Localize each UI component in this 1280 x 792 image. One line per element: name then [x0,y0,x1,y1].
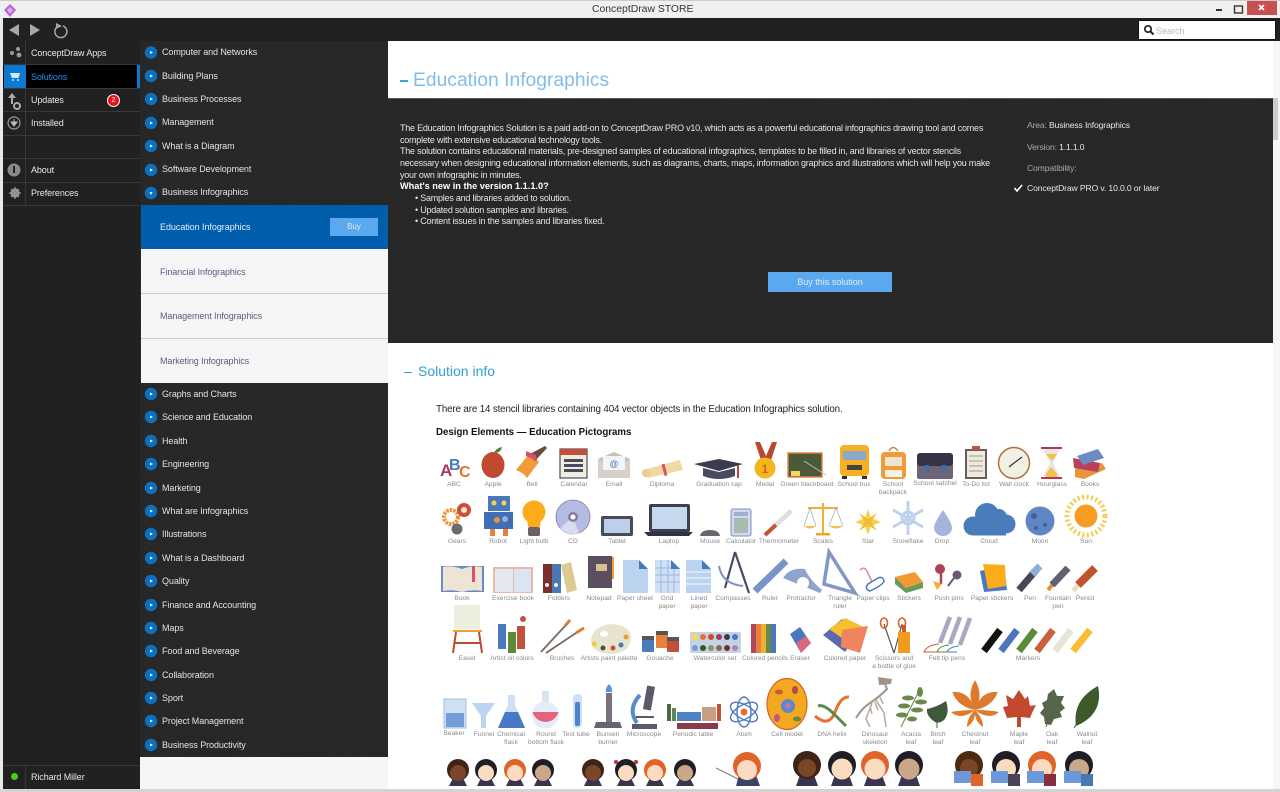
icon: ruler [755,561,786,602]
icon: paper sheet: Paper sheet [617,595,653,602]
description paragraph: your own infographic in minutes. [400,170,522,180]
icon: book: Book [454,595,470,602]
pupils row: boys [447,759,554,786]
icon: to-do list: To-Do list [962,481,990,488]
category: Maps [162,623,184,633]
icon: dinosaur skeleton: Dinosaur [862,731,889,738]
icon: birch leaf [927,701,948,746]
toolbar [3,18,1280,41]
icon: fountain pen: Fountain [1045,595,1071,602]
icon: chemical flask [497,695,525,746]
icon: chemical flask: flask [504,739,519,746]
icon: book [441,566,484,602]
nav label: Installed [31,118,64,128]
category: Science and Education [162,412,252,422]
icon: scissors and a bottle of glue: Scissors and [875,655,913,662]
icon: snowflake: Snowflake [893,538,924,545]
category: What is a Diagram [162,141,234,151]
icon: watercolor set [690,632,741,662]
dark description panel [388,98,1273,343]
category: What are Infographics [162,506,248,516]
icon: grid paper [655,560,680,610]
icon: cloud: Cloud [980,538,998,545]
icon: calendar [560,449,588,488]
search placeholder: Search [1156,26,1185,36]
icon: robot [484,496,513,545]
icon: school backpack: backpack [879,489,908,496]
icon: bunsen burner [594,684,622,746]
icon: colored pencils [742,624,789,662]
pupil [475,759,497,786]
icon: acacia leaf: leaf [906,739,917,746]
icon: funnel: Funnel [474,731,495,738]
readers row [954,751,1093,786]
icon: felt tip pens: Felt tip pens [929,655,966,662]
icon: markers [984,630,1090,662]
pupil [614,759,638,786]
icon: round bottom flask [528,691,565,746]
category: Building Plans [162,71,218,81]
description paragraph: The solution contains educational materials, pre-designed samples of educational infographics, templates to be filled in, and libraries of vector stencils [400,146,961,156]
icon: bell: Bell [526,481,538,488]
icon: drop [934,510,952,545]
solution row: financial [141,249,388,294]
buy button: Buy [347,222,361,231]
icon: star [855,509,881,545]
description paragraph: necessary when designing educational information elements, such as diagrams, charts, maps, information graphics and illustrations which will help you make [400,158,990,168]
icon: calculator: Calculator [726,538,757,545]
icon: fountain pen [1045,568,1071,610]
icon: beaker [443,699,466,737]
icon: tablet: Tablet [608,538,626,545]
category: Software Development [162,164,251,174]
pupil [447,759,469,786]
icon: chemical flask: Chemical [497,731,525,738]
description paragraph: What's new in the version 1.1.1.0? [400,181,549,191]
nav label: Preferences [31,188,78,198]
category: Business Productivity [162,740,246,750]
pupil [504,759,526,786]
icon: wall clock: Wall clock [999,481,1030,488]
icon: protractor [783,569,822,602]
man [861,751,889,786]
buy button [330,218,378,236]
icon: updates [8,93,20,109]
icon: chestnut leaf: leaf [970,739,981,746]
icon: brushes [541,620,584,662]
icon: markers: Markers [1016,655,1041,662]
category: Collaboration [162,670,214,680]
icon: maple leaf [1003,690,1036,746]
icon: mouse: Mouse [700,538,720,545]
icon: medal [754,442,777,488]
icon: star: Star [862,538,875,545]
icon: to-do list [962,446,990,488]
title dash [400,80,408,82]
icon: birch leaf: Birch [930,731,946,738]
icon: scissors and a bottle of glue: a bottle of glue [872,663,916,670]
icon: pen: Pen [1024,595,1036,602]
solution metadata [1014,120,1160,193]
icon: cloud [964,503,1016,545]
icon: chestnut leaf [951,680,999,746]
man [793,751,821,786]
icon: moon: Moon [1032,538,1049,545]
icon: books: Books [1081,481,1100,488]
search icon [1144,25,1154,36]
icon: acacia leaf [896,687,927,746]
icon: gears [444,503,471,545]
icon: sun: Sun [1080,538,1092,545]
icon: books [1073,449,1106,488]
man [895,751,923,786]
man [828,751,856,786]
icon: acacia leaf: Acacia [901,731,921,738]
intro sentence: There are 14 stencil libraries containing 404 vector objects in the Education Infographics solution. [436,404,843,415]
category: Finance and Accounting [162,600,256,610]
icon: exercise book [492,567,535,602]
user name: Richard Miller [31,772,85,782]
pupil [644,759,666,786]
selection marker [137,65,140,88]
user status [11,772,85,782]
solution metadata: ConceptDraw PRO v. 10.0.0 or later [1027,183,1160,193]
icon: folders [543,562,577,602]
icon: light bulb: Light bulb [519,538,549,545]
nav label: Solutions [31,72,67,82]
icon: artists paint palette [581,624,638,662]
icon: notepad [586,556,614,602]
icon: colored paper: Colored paper [824,655,867,662]
icon: stickers [895,572,923,602]
category: Business Infographics [162,187,248,197]
badge: updates count: 2 [112,97,115,104]
left window edge [0,18,3,792]
nav icons [7,47,22,199]
icon: stickers: Stickers [897,595,922,602]
icon: lined paper [686,560,711,610]
icon: snowflake [893,501,924,545]
icon: abc [440,457,471,488]
icon: thermometer [759,511,800,545]
icon: apple: Apple [484,481,502,488]
solution metadata: Area: Business Infographics [1027,120,1130,130]
icon: gouache [642,631,679,662]
icon: green blackboard [780,453,834,488]
window controls [1216,1,1277,15]
icon: funnel [472,703,495,738]
icon: abc: A [440,461,452,480]
icon: colored pencils: Colored pencils [742,655,789,662]
icon: fountain pen: pen [1052,603,1064,610]
icon: watercolor set: Watercolor set [694,655,737,662]
nav label: ConceptDraw Apps [31,48,106,58]
icon: dinosaur skeleton: skeleton [863,739,888,746]
icon: hourglass: Hourglass [1037,481,1068,488]
icon: easel: Easel [459,655,476,662]
icon: test tube: Test tube [562,731,590,738]
icon: cd: CD [568,538,578,545]
icon: drop: Drop [935,538,950,545]
icon: exercise book: Exercise book [492,595,535,602]
category: Marketing [162,483,201,493]
icon: paper clips [856,568,890,602]
empty list area [140,757,388,790]
app icon [4,4,16,17]
icon: eraser: Eraser [790,655,811,662]
icon: atom [728,697,760,738]
icon: abc: C [459,464,471,481]
icon: school bus [837,445,871,488]
icon: triangle ruler: Triangle [828,595,852,602]
icon: cart [10,73,20,81]
icon: diploma: Diploma [650,481,675,488]
icon: triangle ruler: ruler [833,603,847,610]
scrollbar thumb [1273,98,1278,140]
icon: hourglass [1037,447,1068,488]
icon: apple [482,447,504,488]
category: Health [162,436,187,446]
icon: scales [804,503,843,545]
icon: preferences [9,187,21,199]
pupil [582,759,604,786]
icon: periodic table [667,704,721,738]
icon: felt tip pens [924,617,970,662]
solution name: Financial Infographics [160,267,246,277]
buy this solution button [768,272,892,292]
icon: graduation cap [694,459,743,488]
icon: school satchel [913,453,957,487]
icon: thermometer: Thermometer [759,538,800,545]
icon: chestnut leaf: Chestnut [962,731,989,738]
category: Graphs and Charts [162,389,237,399]
icon: school bus: School bus [837,481,871,488]
window title bar [0,0,1280,18]
category: Illustrations [162,529,206,539]
icon: pencil: Pencil [1076,595,1095,602]
icon: triangle ruler [824,552,855,610]
solution metadata: Version: 1.1.1.0 [1027,142,1084,152]
icon: birch leaf: leaf [933,739,944,746]
pupil [674,759,696,786]
icon: tablet [601,516,633,545]
badge: updates count [107,94,120,107]
heading dash [404,372,412,373]
icon: artist oil colors [490,616,534,662]
selected nav item: solutions [3,65,140,88]
icon: abc: B [449,457,461,474]
icon: school backpack: School [883,481,904,488]
icon: brushes: Brushes [550,655,575,662]
icon: email [598,452,630,488]
icon: oak leaf [1040,689,1065,746]
category: Quality [162,576,189,586]
section heading: solution info: Solution info [418,363,495,379]
icon: beaker: Beaker [443,730,465,737]
icon: pencil [1073,568,1095,602]
description paragraph: • Content issues in the samples and libraries fixed. [415,216,604,226]
reader [1027,751,1056,786]
icon: scales: Scales [813,538,834,545]
icon: paper stickers [971,564,1014,602]
icon: calendar: Calendar [560,481,588,488]
solution row: management [141,294,388,339]
icon: dinosaur skeleton [856,677,892,746]
icon: colored paper [823,618,868,662]
category: What is a Dashboard [162,553,244,563]
icon: robot: Robot [489,538,507,545]
icon: scissors and a bottle of glue [872,618,916,670]
pupil [532,759,554,786]
icon: about [8,164,20,176]
reader [991,751,1020,786]
description paragraph: The Education Infographics Solution is a paid add-on to ConceptDraw PRO v10, which acts as a powerful educational infographics drawing tool and comes [400,123,983,133]
scientists row [793,751,923,786]
selected solution row [141,205,388,249]
left navigation column [3,41,140,792]
icon: artists paint palette: Artists paint palette [581,655,638,662]
icon: green blackboard: Green blackboard [780,481,834,488]
icon: test tube [562,694,590,738]
cart icon tile [4,65,26,88]
icon: protractor: Protractor [786,595,816,602]
solution name: Marketing Infographics [160,356,249,366]
icon: walnut leaf: Walnut [1077,731,1097,738]
nav label: About [31,165,54,175]
icon: maple leaf: leaf [1014,739,1025,746]
reader [954,751,983,786]
category: Sport [162,693,183,703]
icon: gears: Gears [448,538,467,545]
icon: bunsen burner: Bunsen [597,731,620,738]
buy this solution button: Buy this solution [797,277,863,287]
icon: lined paper: Lined [691,595,707,602]
category: Project Management [162,716,243,726]
icon: bell [516,446,547,488]
icon: periodic table: Periodic table [673,731,714,738]
icon: round bottom flask: Round [536,731,556,738]
scrollbar [1273,41,1280,789]
icon: atom: Atom [736,731,752,738]
icon: pen [1019,566,1040,602]
search box [1138,20,1276,40]
icon: cell model [767,678,807,738]
icon: notepad: Notepad [586,595,612,602]
icon: graduation cap: Graduation cap [696,481,742,488]
icon: calculator [726,509,757,545]
solution row: marketing [141,339,388,383]
icon: artist oil colors: Artist oil colors [490,655,534,662]
icon: light bulb [519,500,549,545]
icon: push pins: Push pins [934,595,964,602]
icon: grid paper: Grid [661,595,674,602]
icon: email: @ [609,459,619,469]
description paragraph: • Updated solution samples and libraries. [415,205,569,215]
icon: abc: ABC [447,481,461,488]
category: Food and Beverage [162,646,240,656]
navigation buttons [9,23,68,38]
teacher with pointer [716,752,761,786]
icon: cd [556,500,590,545]
library heading: Design Elements — Education Pictograms [436,427,631,438]
icon: mouse [700,530,720,545]
page title: Education Infographics [413,70,609,91]
reader [1064,751,1093,786]
icon: school satchel: School satchel [913,480,957,487]
description paragraph: • Samples and libraries added to solution. [415,193,571,203]
icon: maple leaf: Maple [1010,731,1028,738]
icon: walnut leaf [1074,686,1099,746]
category: Computer and Networks [162,47,257,57]
bottom window edge [0,789,1280,792]
icon: compasses: Compasses [715,595,751,602]
icon: diploma [642,460,683,488]
icon: cell model: Cell model [771,731,803,738]
icon: laptop [644,504,693,545]
category: Management [162,117,214,127]
bullets [144,46,158,752]
solutions category panel [140,41,388,757]
icon: paper stickers: Paper stickers [971,595,1014,602]
online dot [11,773,18,780]
nav label: Updates [31,95,64,105]
icon: gouache: Gouache [646,655,674,662]
icon: grid paper: paper [658,603,676,610]
icon: bunsen burner: burner [598,739,618,746]
window title: ConceptDraw STORE [592,4,693,15]
icon: moon [1026,506,1054,545]
icon: apps [10,47,21,57]
icon: walnut leaf: leaf [1082,739,1093,746]
icon: installed [8,117,20,129]
icon: oak leaf: Oak [1046,731,1059,738]
icon: laptop: Laptop [659,538,680,545]
icon: microscope: Microscope [627,731,661,738]
icon: dna helix [815,697,849,738]
icon: push pins [933,564,964,602]
solution metadata: Compatibility: [1027,163,1076,173]
icon: ruler: Ruler [762,595,779,602]
icon: folders: Folders [548,595,571,602]
description paragraph: complete with extensive educational technology tools. [400,135,602,145]
solution name: Management Infographics [160,311,262,321]
icon: lined paper: paper [690,603,708,610]
category: Business Processes [162,94,241,104]
icon: easel [453,605,482,662]
icon: wall clock [998,448,1030,488]
icon: compasses [715,552,751,602]
icon: sun [1067,497,1105,545]
icon: round bottom flask: bottom flask [528,739,565,746]
icon: oak leaf: leaf [1047,739,1058,746]
pupils row: girls [582,759,696,786]
icon: eraser [790,627,811,662]
solution name: Education Infographics [160,222,250,232]
icon: school backpack [879,448,908,496]
category: Engineering [162,459,209,469]
icon: dna helix: DNA helix [817,731,847,738]
icon: medal: 1 [762,462,769,476]
icon: paper sheet [617,560,653,602]
icon: paper clips: Paper clips [856,595,890,602]
description paragraph [400,123,990,226]
check mark [1014,184,1022,192]
icon: email: Email [606,481,623,488]
icon: microscope [627,685,661,738]
icon: medal: Medal [756,481,775,488]
